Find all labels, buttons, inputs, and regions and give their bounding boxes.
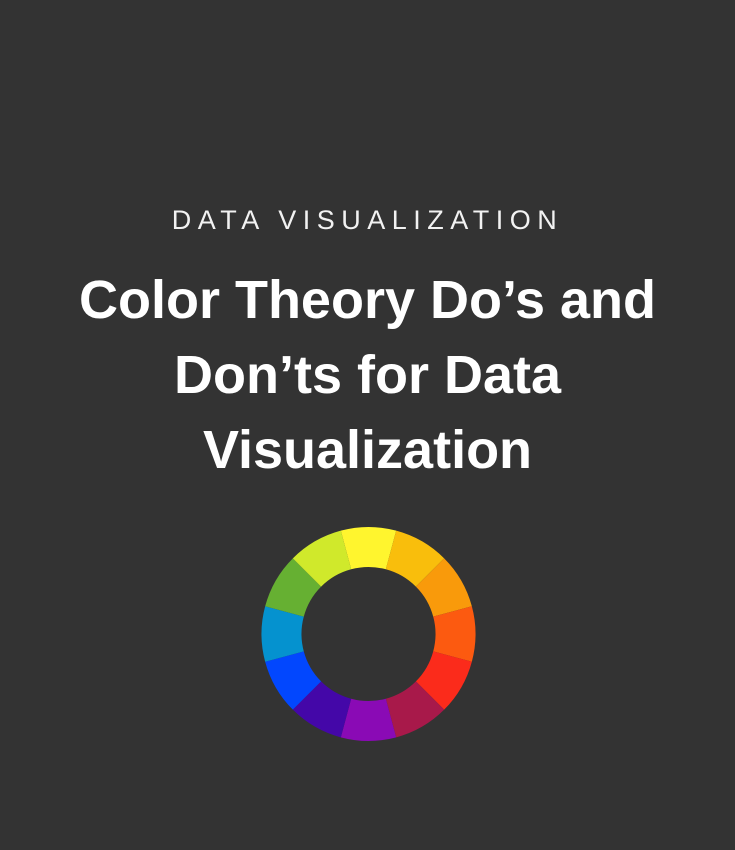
title: Don’ts for Data	[174, 345, 561, 405]
subtitle: DATA VISUALIZATION	[172, 205, 563, 235]
title	[79, 270, 656, 480]
title: Visualization	[203, 420, 532, 480]
title: Color Theory Do’s and	[79, 270, 656, 330]
